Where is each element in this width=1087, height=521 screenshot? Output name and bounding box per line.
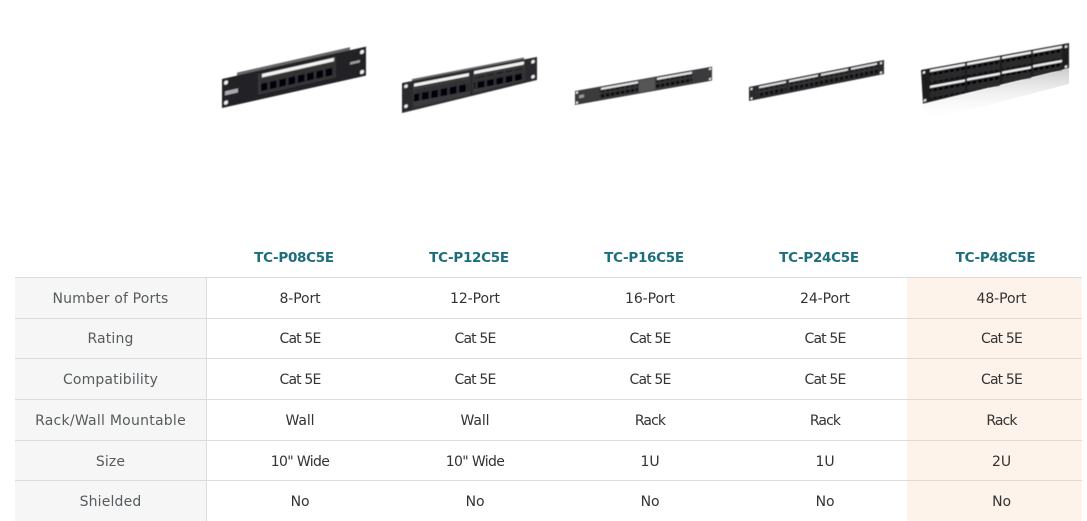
table row: Rating: Cat 5E: [805, 330, 845, 346]
table row: Number of Ports: 48-Port: [977, 291, 1026, 307]
table row: Compatibility: Cat 5E: [280, 372, 320, 388]
table row: Number of Ports: [15, 277, 1082, 318]
table row: Size: 1U: [641, 454, 659, 470]
table row: Size: 10" Wide: [271, 454, 329, 470]
model heading: TC-P08C5E: TC-P08C5E: [254, 250, 334, 266]
table row: Size: [15, 440, 1082, 480]
table row: Compatibility: Cat 5E: [630, 372, 670, 388]
model heading: TC-P48C5E: TC-P48C5E: [956, 250, 1035, 266]
image: 12-port patch panel: [402, 55, 537, 113]
table row: Rating: [15, 318, 1082, 358]
table row: Rating: Rating: [87, 330, 134, 346]
table row: Compatibility: Cat 5E: [981, 372, 1022, 388]
table row: Shielded: No: [816, 494, 834, 510]
table row: Compatibility: Cat 5E: [805, 372, 845, 388]
image: 16-port patch panel: [575, 67, 712, 105]
table row: Shielded: Shielded: [80, 494, 141, 510]
model heading: TC-P12C5E: TC-P12C5E: [429, 250, 509, 266]
table row: Number of Ports: 8-Port: [279, 291, 321, 307]
table row: Number of Ports: 24-Port: [800, 291, 850, 307]
image: 24-port patch panel: [749, 60, 884, 101]
model heading: TC-P24C5E: TC-P24C5E: [779, 250, 859, 266]
image: 8-port patch panel: [222, 44, 366, 108]
table row: Size: Size: [96, 454, 125, 470]
table row: Number of Ports: 16-Port: [625, 291, 675, 307]
table row: Shielded: No: [466, 494, 484, 510]
table row: Shielded: [15, 480, 1082, 521]
table row: Compatibility: Cat 5E: [455, 372, 495, 388]
product images row: [221, 42, 1070, 114]
table row: Size: 10" Wide: [446, 454, 504, 470]
panel reflection: [923, 69, 1069, 122]
table row: Rack/Wall Mountable: Wall: [461, 413, 489, 429]
table row: Rating: Cat 5E: [455, 330, 495, 346]
table row: Rack/Wall Mountable: Wall: [286, 413, 314, 429]
table row: Rack/Wall Mountable: Rack: [635, 413, 665, 429]
panel body: [921, 43, 1069, 104]
table row: Rack/Wall Mountable: Rack/Wall Mountable: [35, 413, 186, 429]
table row: Rack/Wall Mountable: Rack: [986, 413, 1017, 429]
table row: Rating: Cat 5E: [981, 330, 1022, 346]
table row: Rack/Wall Mountable: [15, 399, 1082, 440]
table row: Size: 2U: [992, 454, 1011, 470]
table row: Rating: Cat 5E: [280, 330, 320, 346]
model heading: TC-P16C5E: TC-P16C5E: [604, 250, 684, 266]
table row: Shielded: No: [291, 494, 309, 510]
table row: Shielded: No: [992, 494, 1011, 510]
table row: Size: 1U: [816, 454, 834, 470]
image: 48-port patch panel with reflection: [921, 43, 1069, 122]
table row: Compatibility: Compatibility: [63, 372, 158, 388]
table row: Compatibility: [15, 358, 1082, 399]
table row: Rating: Cat 5E: [630, 330, 670, 346]
table row: Number of Ports: 12-Port: [450, 291, 500, 307]
table row: Rack/Wall Mountable: Rack: [810, 413, 840, 429]
table row: Number of Ports: Number of Ports: [53, 291, 168, 307]
table row: Shielded: No: [641, 494, 659, 510]
